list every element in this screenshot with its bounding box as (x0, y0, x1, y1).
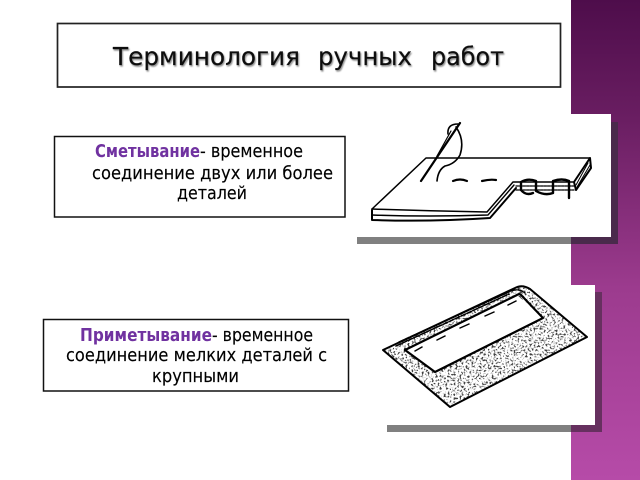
title: ручных (318, 42, 412, 71)
basting dashes (415, 301, 516, 351)
stippled fabric texture (383, 286, 587, 407)
illustration: small patch basted onto a large piece (383, 286, 587, 407)
needle (421, 123, 460, 181)
thread (437, 124, 462, 181)
sidebar: purple gradient band (571, 0, 640, 480)
panel: image card 1 shadow (357, 122, 618, 244)
definition text 2 (66, 326, 327, 387)
dashes (453, 180, 496, 181)
illustration: basting stitch on layered fabric (372, 123, 591, 221)
title: работ (431, 42, 504, 71)
definition text 2: крупными (152, 367, 239, 387)
inner patch outline (405, 294, 543, 372)
definition text 2: - временное (212, 326, 313, 346)
definition text 1: Сметывание (95, 142, 200, 162)
definition text 1: соединение двух или более (92, 164, 333, 184)
definition text 2: соединение мелких деталей с (66, 346, 327, 366)
panel: image card 1 (357, 114, 611, 237)
outer piece outline (383, 286, 587, 407)
definition text 1: деталей (177, 184, 247, 204)
definition text 2: Приметывание (80, 326, 212, 346)
definition box 2 (44, 320, 348, 391)
panel: image card 2 (387, 285, 595, 425)
definition text 1 (92, 142, 333, 204)
definition text 1: - временное (200, 142, 303, 162)
title box (58, 24, 560, 87)
stitches on fabric edge (521, 180, 569, 198)
title: Терминология (112, 42, 300, 71)
panel: image card 2 shadow (387, 292, 602, 432)
definition box 1 (54, 136, 345, 217)
